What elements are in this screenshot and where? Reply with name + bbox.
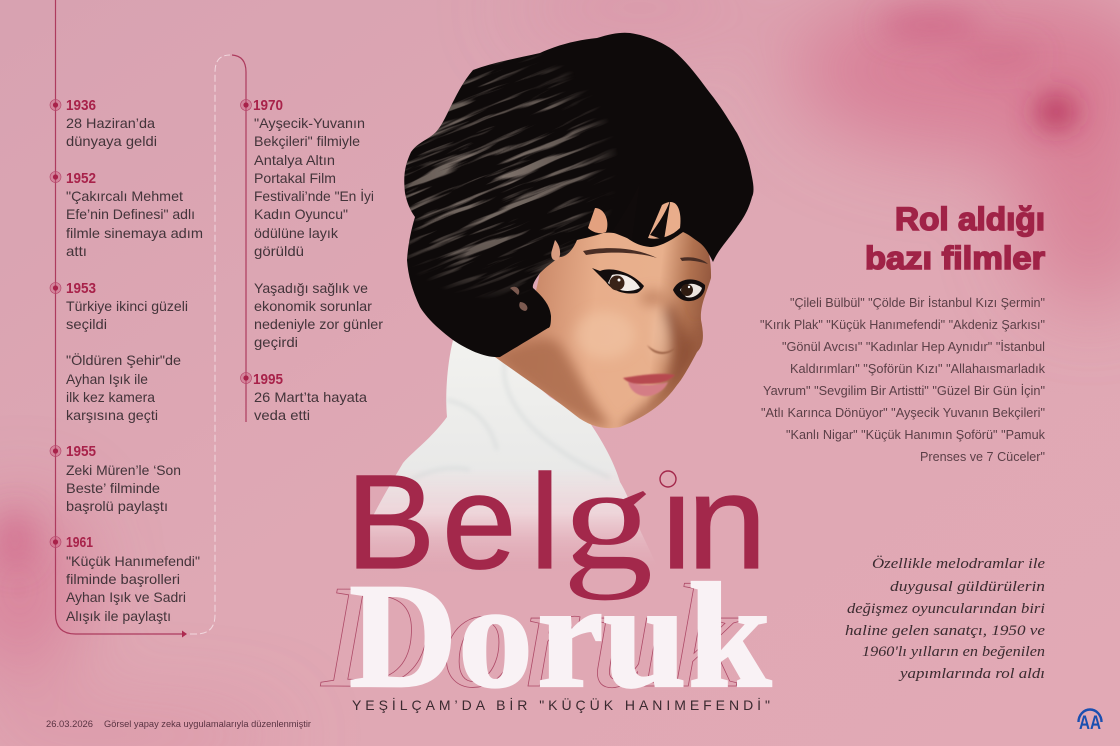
right eye [673,279,705,301]
right eyebrow [680,257,708,264]
timeline line: first column [56,0,230,638]
event 1953: karşısına geçti [66,407,158,423]
event 1961 [66,535,200,624]
neck and face [495,200,711,428]
footer date and note: Görsel yapay zeka uygulamalarıyla düzenlenmiştir [104,719,311,730]
title: Doruk: r [537,553,604,719]
title: Doruk: k [688,553,772,719]
event 1961: Alışık ile paylaştı [66,608,171,624]
face shading [495,290,700,430]
event 1955: 1955 [66,444,96,460]
event 1955: başrolü paylaştı [66,498,168,514]
event 1995: veda etti [254,407,310,423]
left eye [592,268,644,294]
event 1953: 1953 [66,281,96,297]
film list: Yavrum" "Sevgilim Bir Artistti" "Güzel Bir Gün İçin" [763,384,1045,398]
event 1970: ödülüne layık [254,225,339,241]
title: Belgin: e [442,448,517,597]
event 1936: 28 Haziran’da [66,115,155,131]
event 1936: dünyaya geldi [66,133,157,149]
event 1961: Ayhan Işık ve Sadri [66,589,186,605]
film list: "Çileli Bülbül" "Çölde Bir İstanbul Kızı Şermin" [790,296,1045,310]
film list: "Atlı Karınca Dönüyor" "Ayşecik Yuvanın Bekçileri" [761,406,1045,420]
subtitle: YEŞİLÇAM’DA BİR "KÜÇÜK HANIMEFENDİ" [352,696,770,713]
event 1936 [66,98,157,149]
event 1970: Antalya Altın [254,152,335,168]
italic description: haline gelen sanatçı, 1950 ve [845,623,1046,639]
event 1961: 1961 [66,535,93,551]
nose shadow [647,345,675,354]
heading: Rol aldığı bazı filmler [865,201,1045,276]
heading: Rol aldığı bazı filmler: bazı filmler [865,240,1045,276]
title: Belgin [346,435,767,601]
event 1952 [66,171,203,259]
film list: Kaldırımları" "Şoförün Kızı" "Allahaısmarladık [790,362,1046,376]
event 1970: Festivali’nde "En İyi [254,187,374,204]
white shirt collar [352,340,660,572]
event 1970: Kadın Oyuncu" [254,206,348,222]
italic description: duygusal güldürülerin [890,579,1045,595]
film list [760,296,1046,464]
title: Doruk outline: Doruk [320,555,740,719]
title: Doruk [349,553,772,719]
title: Belgin: n [687,448,767,597]
fringe wisps [551,182,680,260]
event 1955 [66,444,181,514]
curl highlight [510,287,527,311]
footer date and note: 26.03.2026 [46,719,93,730]
event 1953: "Öldüren Şehir"de [66,351,181,368]
event 1953: ilk kez kamera [66,389,155,405]
event 1995: 26 Mart’ta hayata [254,389,367,405]
event 1952: filmle sinemaya adım [66,225,203,241]
event 1970: görüldü [254,243,304,259]
event 1995: 1995 [253,372,283,388]
italic description [845,555,1046,682]
event 1970: ekonomik sorunlar [254,298,372,314]
film list: Prenses ve 7 Cüceler" [920,450,1045,464]
event 1970 [253,98,383,350]
event 1961: "Küçük Hanımefendi" [66,553,200,569]
timeline line: second column [232,55,246,422]
film list: "Kanlı Nigar" "Küçük Hanımın Şoförü" "Pamuk [786,428,1046,442]
film list: "Gönül Avcısı" "Kadınlar Hep Aynıdır" "İstanbul [782,340,1045,354]
italic description: Özellikle melodramlar ile [872,555,1046,572]
shirt folds [410,360,610,480]
event 1970: nedeniyle zor günler [254,316,383,332]
event 1995 [253,372,367,423]
italic description: yapımlarında rol aldı [898,666,1045,682]
left eyebrow [583,248,657,258]
event 1953 [66,281,188,423]
event 1953: Türkiye ikinci güzeli [66,298,188,314]
title: Doruk: o [458,553,533,719]
italic description: değişmez oyuncularından biri [847,601,1045,617]
portrait of Belgin Doruk [370,32,754,547]
event 1970: geçirdi [254,334,298,350]
event 1952: attı [66,243,87,259]
heading: Rol aldığı bazı filmler: Rol aldığı [895,201,1045,237]
icon: AA logo: AA [1079,713,1101,734]
event 1953: seçildi [66,316,107,332]
title: Belgin: ı [658,448,695,597]
event 1936: 1936 [66,98,96,114]
event 1970: Yaşadığı sağlık ve [254,280,368,296]
event 1952: "Çakırcalı Mehmet [66,188,183,204]
event 1970: "Ayşecik-Yuvanın [254,115,365,131]
film list: "Kırık Plak" "Küçük Hanımefendi" "Akdeniz Şarkısı" [760,318,1045,332]
title: Belgin: g [562,435,653,601]
title: Belgin: B [346,448,435,597]
event 1961: filminde başrolleri [66,571,180,587]
hair [404,32,754,358]
event 1970: Portakal Film [254,170,336,186]
event 1970: 1970 [253,98,283,114]
event 1970: Bekçileri" filmiyle [254,133,360,149]
title: Doruk: D [349,553,457,719]
lips [623,374,675,396]
event 1955: Zeki Müren’le ‘Son [66,462,181,478]
event 1952: Efe’nin Definesi" adlı [66,206,195,222]
event 1952: 1952 [66,171,96,187]
timeline markers [50,100,252,548]
event 1953: Ayhan Işık ile [66,371,148,387]
event 1955: Beste’ filminde [66,480,160,496]
italic description: 1960'lı yılların en beğenilen [862,644,1045,660]
title: Belgin: l [530,448,560,597]
title: Doruk: u [603,553,686,719]
